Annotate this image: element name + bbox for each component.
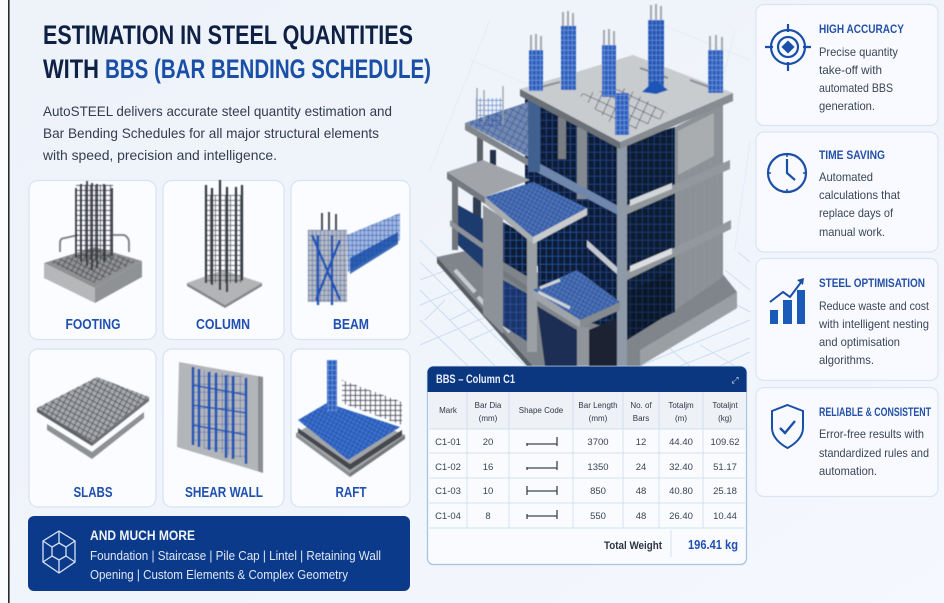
high accuracy text: generation.: [819, 99, 875, 113]
table rows: 24: [636, 462, 646, 473]
high accuracy text: take-off with: [819, 63, 882, 77]
time saving text: replace days of: [819, 206, 894, 220]
banner heading: AND MUCH MORE: [90, 528, 195, 543]
table rows: C1-01: [435, 437, 461, 448]
raft illustration: [296, 360, 405, 477]
panel: BBS table: [428, 366, 746, 564]
footing illustration: [44, 181, 142, 303]
intro paragraph: AutoSTEEL delivers accurate steel quantity estimation and: [43, 103, 392, 119]
banner: and much more: [28, 516, 410, 591]
title: WITH: [43, 54, 99, 84]
table rows: 48: [636, 486, 646, 497]
table rows: 51.17: [713, 462, 737, 473]
table rows: 10: [483, 486, 493, 497]
intro paragraph: Bar Bending Schedules for all major structural elements: [43, 125, 379, 141]
time saving text: Automated: [819, 170, 873, 184]
slabs illustration: [37, 377, 149, 459]
roof column 2: [561, 11, 576, 90]
steel optimisation text: algorithms.: [819, 353, 874, 367]
total weight row: Total Weight: [604, 540, 662, 552]
roof column 3: [602, 29, 616, 97]
title: BBS (BAR BENDING SCHEDULE): [105, 54, 431, 84]
column label: COLUMN: [196, 317, 250, 333]
high accuracy text: Precise quantity: [819, 45, 898, 59]
panel: slabs: [29, 349, 156, 507]
roof columns with rebar: [529, 4, 723, 135]
icon: clock: [768, 154, 806, 192]
reliable text: automation.: [819, 464, 877, 478]
lower left concrete wall: [483, 205, 578, 342]
table rows: 32.40: [669, 462, 693, 473]
table rows: 20: [483, 437, 493, 448]
upper left terrace column: [477, 133, 496, 178]
panel: raft: [291, 349, 410, 507]
table rows: 850: [590, 486, 606, 497]
upper left face with blue rebar: [525, 98, 620, 330]
steel optimisation text: Reduce waste and cost: [819, 299, 930, 313]
icon: shield check: [772, 405, 803, 448]
shear wall illustration: [177, 362, 263, 473]
column header row: No. of: [630, 401, 652, 410]
column header row: Bar Length: [578, 401, 618, 410]
upper left terrace: [465, 102, 530, 167]
panel: column: [163, 180, 284, 340]
footing label: FOOTING: [66, 317, 120, 333]
table header bar: [428, 366, 746, 392]
panel: high accuracy: [756, 4, 938, 126]
table rows: 25.18: [713, 486, 737, 497]
title: ESTIMATION IN STEEL QUANTITIES: [43, 20, 413, 50]
table rows: 10.44: [713, 511, 737, 522]
left wing slab and columns: [447, 160, 530, 270]
column header row: Shape Code: [519, 406, 564, 415]
table rows: 109.62: [710, 437, 740, 448]
building foundation plate: [437, 250, 737, 366]
steel optimisation text: [818, 299, 930, 367]
right concrete wall: [675, 103, 723, 310]
table rows: 1350: [587, 462, 609, 473]
reliable text: Error-free results with: [819, 427, 924, 441]
panel: reliable and consistent: [756, 388, 938, 496]
roof slab: [520, 55, 733, 149]
column header row: (kg): [718, 414, 732, 423]
time saving text: calculations that: [819, 188, 901, 202]
table rows: 26.40: [669, 511, 693, 522]
beam illustration: [308, 212, 400, 305]
icon: wireframe cube: [43, 531, 75, 573]
roof column 4: [642, 4, 668, 94]
table rows: C1-04: [435, 511, 461, 522]
front corner column: [617, 143, 627, 366]
reliable text: [819, 427, 929, 478]
raft label: RAFT: [336, 485, 367, 501]
roof column 5: [708, 35, 723, 93]
column header row: Bar Dia: [475, 401, 502, 410]
panel: beam: [291, 180, 410, 340]
time saving text: [819, 170, 901, 239]
column illustration: [187, 180, 262, 308]
title: [43, 20, 431, 84]
lower terrace with exposed rebar: [533, 270, 620, 328]
panel: steel optimisation: [756, 258, 938, 380]
upper terrace rebar cage: [476, 86, 503, 126]
reliable text: standardized rules and: [819, 446, 929, 460]
blue grey column: [528, 100, 540, 172]
panel: shear wall: [163, 349, 284, 507]
table rows: 8: [485, 511, 491, 522]
table rows: C1-03: [435, 486, 461, 497]
table rows: 16: [483, 462, 493, 473]
roof column 1: [529, 34, 543, 91]
total weight row: 196.41 kg: [688, 537, 738, 552]
shear wall label: SHEAR WALL: [185, 485, 263, 501]
steel optimisation text: and optimisation: [819, 335, 900, 349]
table rows: 44.40: [669, 437, 693, 448]
table rows: 3700: [587, 437, 609, 448]
steel optimisation text: with intelligent nesting: [818, 317, 929, 331]
intro paragraph: [42, 103, 392, 163]
icon: bar chart with arrow: [770, 278, 805, 324]
time saving text: manual work.: [819, 225, 885, 239]
panel: time saving: [756, 132, 938, 252]
roof front column cage: [615, 93, 629, 135]
table header bar: ⤢: [730, 375, 739, 385]
banner list: Foundation | Staircase | Pile Cap | Lintel | Retaining Wall: [90, 549, 381, 563]
high accuracy text: automated BBS: [819, 81, 893, 95]
table rows: 40.80: [669, 486, 693, 497]
banner list: [90, 549, 381, 582]
intro paragraph: with speed, precision and intelligence.: [42, 147, 277, 163]
table rows: C1-02: [435, 462, 461, 473]
terrace with exposed blue rebar: [485, 182, 587, 244]
panel: footing: [29, 180, 156, 340]
column header row: (m): [675, 414, 687, 423]
high accuracy heading: HIGH ACCURACY: [819, 22, 904, 36]
table rows: 12: [636, 437, 646, 448]
left margin strip: [0, 0, 10, 603]
beam label: BEAM: [333, 317, 369, 333]
table header bar: BBS – Column C1: [436, 372, 515, 386]
front column of the left wing: [527, 237, 537, 352]
table rows: [435, 437, 740, 522]
total weight row: [604, 530, 738, 557]
right face openings: [620, 127, 675, 338]
column header row: Mark: [439, 406, 458, 415]
column header row: (mm): [479, 414, 498, 423]
icon: target: [765, 24, 811, 71]
steel optimisation heading: STEEL OPTIMISATION: [819, 276, 925, 290]
column header row: (mm): [589, 414, 608, 423]
illustration: multi-storey building with rebar: [437, 4, 737, 366]
ground floor bays: [537, 272, 672, 366]
blueprint drawing behind building: [420, 20, 750, 366]
column header row: [429, 392, 745, 429]
table rows: 550: [590, 511, 606, 522]
shape code icons: [527, 437, 557, 519]
column header row: Totaljm: [668, 401, 694, 410]
slabs label: SLABS: [74, 485, 113, 501]
floor slabs on right face: [623, 160, 731, 282]
time saving heading: TIME SAVING: [819, 148, 885, 162]
column header row: Bars: [633, 414, 649, 423]
column header row: Totaljnt: [712, 401, 738, 410]
high accuracy text: [819, 45, 898, 113]
banner list: Opening | Custom Elements & Complex Geometry: [90, 568, 349, 582]
table rows: 48: [636, 511, 646, 522]
